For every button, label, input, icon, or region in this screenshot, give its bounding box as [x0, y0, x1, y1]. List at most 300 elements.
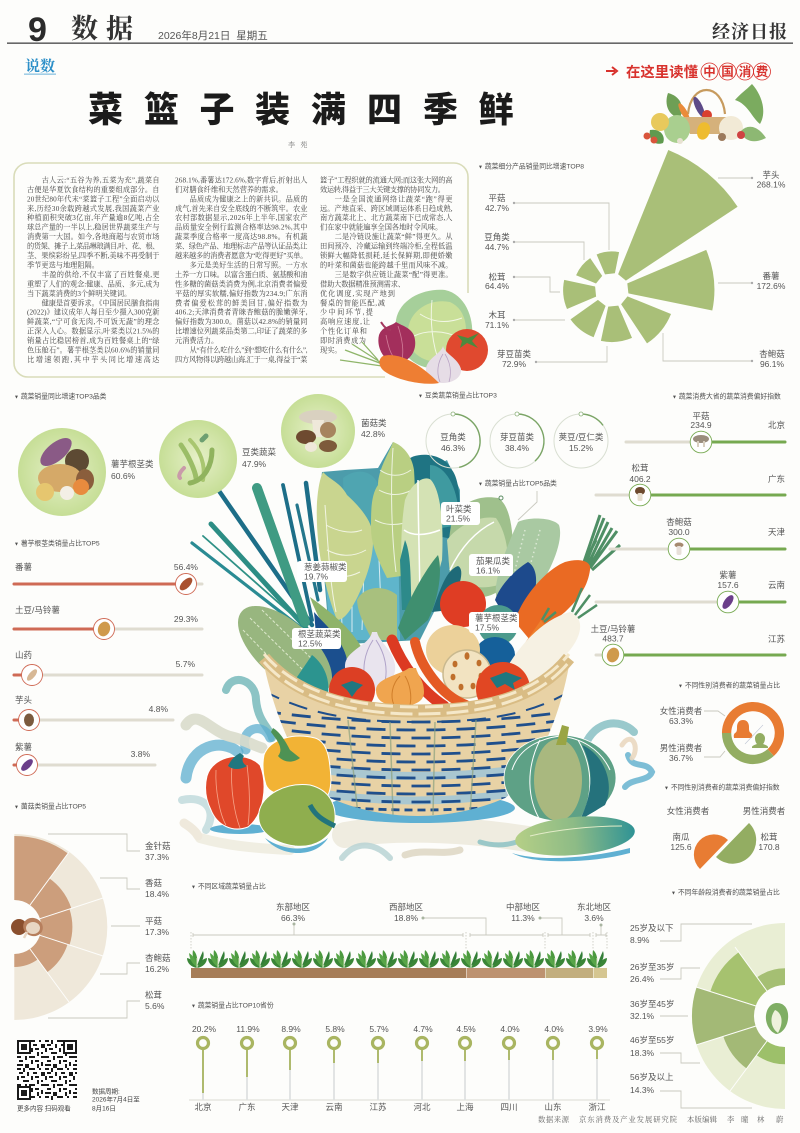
row: Guangdong: 广东 [768, 474, 785, 484]
section: tuber share TOP5 bars [14, 538, 202, 776]
ring: bean sprouts [490, 412, 544, 468]
cucumber [496, 519, 560, 608]
labels: 36岁至45岁 [630, 999, 674, 1009]
article column 2: 从“有什么吃什么”到“想吃什么有什么”, [190, 346, 308, 354]
wax gourd [448, 497, 513, 598]
region labels: 66.3% [281, 913, 305, 923]
data period note: 8月16日 [92, 1104, 116, 1112]
article column 1: 古便是华夏饮食结构的重要组成部分。自 [27, 185, 160, 194]
circle: mushrooms [281, 394, 387, 468]
pumpkin [504, 735, 616, 821]
circled characters: 国 [721, 65, 734, 79]
illustration: cabbage, onion, tomato, garlic and carrot [340, 290, 488, 384]
section: preference index by province [591, 392, 785, 666]
row: Yunnan: 云南 [768, 580, 785, 590]
garlic [345, 632, 395, 692]
label: 薯芋根茎类 [111, 459, 154, 469]
baseline [189, 1099, 610, 1101]
callout: onion ginger garlic pepper: 葱姜蒜椒类 [304, 562, 347, 572]
bar: purple sweet potato [14, 742, 155, 776]
row: Tianjin: 300.0 [668, 527, 690, 537]
bar: potato: 土豆/马铃薯 [15, 605, 60, 615]
heading: ▼ 蔬菜销量占比TOP10省份 [191, 1000, 274, 1010]
province names: 云南 [325, 1102, 343, 1112]
callout: tubers: 薯芋根茎类 [475, 613, 518, 623]
article column 1: 重塑了人们的观念:健康、品质、多元,成为 [27, 279, 160, 288]
percentages [192, 1024, 608, 1034]
row: Yunnan: 紫薯 [719, 570, 737, 580]
labels: 268.1% [757, 180, 786, 190]
labels: 72.9% [502, 359, 526, 369]
region labels: 中部地区 [506, 902, 540, 912]
navy vegetable [314, 612, 348, 690]
article column 1: 消费第一大国。如今,各地商超与农贸市场 [27, 232, 160, 241]
article column 1: 色压舱石”。薯芋根茎类以60.6%的销量同 [27, 346, 160, 354]
tomato [446, 329, 488, 371]
callout: leafy vegetables: 叶菜类 [446, 504, 472, 514]
row: Jiangsu: 483.7 [602, 634, 624, 644]
headline: 子 [200, 82, 235, 133]
headline: 满 [311, 82, 346, 133]
carrot greens [340, 342, 385, 366]
article column 3: 借助大数据精准预测需求、 [320, 279, 405, 288]
article column 1: 的货架、摊子上,菜品琳琅满目,叶、花、根、 [27, 242, 160, 251]
byline: 李 苑 [288, 140, 307, 150]
article column 2: 四方风物得以跨越山海,汇于一桌,得益于“菜 [175, 355, 308, 364]
page number: 9 [28, 11, 47, 49]
bar: potato [14, 605, 202, 640]
row: Beijing [626, 411, 785, 453]
article column 1: 丰盈的供给,不仅丰富了百姓餐桌,更 [42, 270, 160, 279]
cabbage [395, 290, 472, 368]
heading: ▼ 菌菇类销量占比TOP5 [14, 802, 86, 810]
region labels: 18.8% [394, 913, 418, 923]
icon: pea pods [179, 436, 212, 483]
region labels: 东部地区 [276, 902, 310, 912]
callout: root and stem vegetables: 12.5% [298, 638, 323, 648]
half circle: male matsutake [716, 823, 756, 864]
article column 3: 少中间环节,提 [320, 308, 373, 317]
value stems [203, 1050, 597, 1093]
percentages: 5.7% [369, 1024, 389, 1034]
row: Guangdong: 松茸 [631, 463, 649, 473]
carrot [379, 355, 439, 384]
article column 3: 二是冷链设施让蔬菜“鲜”得更久。从 [335, 232, 453, 241]
row: Jiangsu: 江苏 [768, 634, 785, 644]
green round vegetable [478, 605, 518, 645]
row: Beijing: 北京 [768, 420, 785, 430]
article column 3: 个性化订单和 [320, 327, 367, 336]
credits: 京东消费及产业发展研究院 [579, 1115, 678, 1124]
labels: 男性消费者 [743, 806, 786, 816]
row: Yunnan [596, 570, 785, 613]
data period note: 数据周期: [92, 1086, 120, 1096]
labels: 平菇 [145, 916, 163, 926]
fan chart [563, 150, 738, 343]
labels: 松茸 [488, 272, 506, 282]
donut chart [727, 707, 779, 759]
green pepper [259, 785, 335, 846]
article column 2: 农村部数据显示,2026年上半年,国家农产 [175, 213, 308, 222]
article column 1: 古人云:“五谷为养,五菜为充”,蔬菜自 [42, 175, 160, 184]
percentages: 11.9% [236, 1024, 260, 1034]
labels: 杏鲍菇 [759, 349, 785, 359]
region labels: 东北地区 [577, 902, 611, 912]
circle: beans: 47.9% [242, 459, 267, 469]
circled characters: 消 [739, 64, 751, 79]
dashed boundaries [191, 932, 607, 950]
labels: 豆角类 [484, 232, 510, 242]
potato [426, 625, 480, 675]
article column 3: 三是数字供应链让蔬菜“配”得更准。 [335, 270, 453, 279]
icon: shiitake mushrooms [11, 915, 46, 939]
region labels [276, 902, 611, 923]
callout: leafy vegetables: 21.5% [446, 514, 471, 524]
labels: 26岁至35岁 [630, 962, 674, 972]
callout: tubers [469, 612, 519, 633]
article column 2: 菜、绿色产品、地理标志产品等认证品类,让 [175, 242, 308, 251]
onion stem [381, 322, 391, 330]
region labels: 11.3% [511, 913, 535, 923]
article column 1: 销量占比稳居榜首,成为百姓餐桌上的“绿 [27, 336, 160, 345]
province names: 四川 [500, 1102, 518, 1112]
row of plants [187, 950, 607, 968]
basket shadow [325, 793, 515, 823]
credits: 曈 [741, 1115, 749, 1124]
heading: ▼ 薯芋根茎类销量占比TOP5 [14, 538, 100, 548]
section: sales share by region [187, 882, 611, 978]
bar: taro [14, 695, 173, 730]
labels: 56岁及以上 [630, 1072, 674, 1082]
labels: 64.4% [485, 281, 509, 291]
credits: 林 [757, 1115, 765, 1124]
leader lines [514, 178, 752, 362]
region labels: 西部地区 [389, 902, 423, 912]
labels: 37.3% [145, 852, 170, 862]
labels: 16.2% [145, 964, 170, 974]
article column 3: 们在家中就能遍享全国各地时令风味。 [320, 223, 442, 232]
grey stems [203, 1050, 597, 1100]
article column 2: 费者偏爱松茸的鲜美回甘,偏好指数为 [175, 298, 308, 307]
article column 1: 鲜蔬菜,“宁可食无肉,不可饭无蔬”的理念 [27, 317, 160, 326]
row: Beijing: 平菇 [692, 411, 710, 421]
daikon [500, 612, 580, 695]
newspaper logo: 经济日报 [712, 18, 788, 44]
labels: 女性消费者 [660, 706, 703, 716]
heading: ▼ 不同性别消费者的蔬菜销量占比 [678, 680, 780, 690]
labels: 8.9% [630, 935, 650, 945]
radial chart [692, 923, 800, 1109]
labels: 杏鲍菇 [145, 953, 171, 963]
data period note [92, 1086, 140, 1112]
pepper shadow [210, 824, 270, 834]
half circle: female pumpkin [694, 834, 728, 869]
bar: yam [14, 650, 202, 686]
bar: yam: 山药 [15, 650, 32, 660]
callout: nightshades and melons: 茄果瓜类 [476, 556, 511, 566]
labels: 香菇 [145, 878, 163, 888]
section: preference index by gender [664, 782, 786, 869]
ring: soybean: 荚豆/豆仁类 [559, 432, 604, 442]
labels: 18.3% [630, 1048, 655, 1058]
article column 3: 优化调度,实现产地到 [320, 289, 395, 298]
labels: 5.6% [145, 1001, 165, 1011]
article column 1: 种植面积突破3亿亩,年产量逾8亿吨,占全 [27, 213, 160, 222]
bar: purple sweet potato: 3.8% [131, 749, 150, 759]
heading: ▼ 蔬菜消费大省的蔬菜消费偏好指数 [672, 392, 781, 400]
QR code [17, 1040, 77, 1100]
row: Beijing: 234.9 [690, 420, 712, 430]
labels: 金针菇 [145, 841, 171, 851]
onion [378, 322, 415, 363]
chillies [392, 640, 444, 706]
article column 1 [27, 175, 160, 364]
province names: 河北 [413, 1102, 431, 1112]
leader dots [292, 916, 602, 926]
row: Tianjin [610, 517, 785, 560]
article column 2: 268.1%,番薯达172.6%,数字背后,折射出人 [175, 175, 308, 184]
article column 2: 品质成为健康之上的新共识。品质的 [190, 194, 308, 203]
circle: tubers: 60.6% [111, 471, 136, 481]
ring: green beans [426, 412, 480, 468]
section: sales share by age [630, 888, 800, 1109]
circled characters [703, 64, 769, 79]
credits [538, 1115, 784, 1124]
labels: 71.1% [485, 320, 509, 330]
article column 2: 平菇的厚实软糯,偏好指数为234.9;广东消 [175, 289, 308, 298]
article column 3: 现实。 [320, 346, 342, 354]
blue vegetable [475, 637, 515, 673]
labels: 芽豆苗类 [497, 349, 531, 359]
heading: ▼ 不同年龄段消费者的蔬菜销量占比 [671, 888, 780, 896]
labels: 芋头 [762, 170, 780, 180]
article column 1: 比增速领跑,其中芋头同比增速高达 [27, 355, 160, 364]
article column 1: (2022)》建议成年人每日至少摄入300克新 [27, 308, 160, 317]
tomato centre [440, 581, 486, 627]
article column 1: 来,历经30余载跨越式发展,我国蔬菜产业 [27, 204, 160, 213]
labels: 18.4% [145, 889, 170, 899]
percentages: 3.9% [588, 1024, 608, 1034]
article column 3: 田间预冷、冷藏运输到终端冷柜,全程低温 [320, 242, 453, 251]
article column 3: 的叶菜和菌菇也能跨越千里而风味不减。 [320, 260, 452, 270]
labels: 26.4% [630, 974, 655, 984]
article column 3 [320, 175, 453, 354]
section: bean vegetables TOP3 [418, 390, 608, 468]
eggplant [495, 562, 536, 625]
headline: 装 [255, 82, 290, 133]
pepper shadow [265, 838, 328, 853]
headline: 鲜 [478, 82, 514, 133]
article column 1: 球总产量的一半以上,稳居世界蔬菜生产与 [27, 223, 160, 232]
labels: 172.6% [757, 281, 786, 291]
credits: 李 [727, 1115, 735, 1124]
left gourd [223, 590, 347, 710]
percentages: 20.2% [192, 1024, 216, 1034]
row: Guangdong: 406.2 [629, 474, 651, 484]
circle: mushrooms: 42.8% [361, 429, 386, 439]
province names: 北京 [194, 1102, 212, 1112]
ring: green beans: 豆角类 [440, 432, 466, 442]
labels: 木耳 [488, 310, 506, 320]
icon: mushrooms [296, 410, 337, 452]
labels: 125.6 [670, 842, 692, 852]
circled characters: 中 [703, 64, 716, 79]
headline: 四 [367, 82, 402, 133]
article column 2: 多元是美好生活的日常写照。一方水 [190, 260, 308, 270]
pumpkin stem [556, 725, 569, 745]
province names: 广东 [238, 1102, 256, 1112]
label: 菌菇类 [361, 418, 387, 428]
callout: onion ginger garlic pepper: 19.7% [304, 572, 329, 582]
percentages: 4.0% [500, 1024, 520, 1034]
callout: nightshades and melons: 16.1% [476, 566, 501, 576]
data period note: 2026年7月4日至 [92, 1094, 140, 1104]
bar: taro: 芋头 [15, 695, 33, 705]
column tag: 说数 [25, 55, 55, 76]
ring: soybean [554, 412, 608, 468]
percentages: 4.7% [413, 1024, 433, 1034]
article column 2: 406.2;天津消费者青睐杏鲍菇的脆嫩弹牙, [175, 308, 308, 317]
bar: yam: 5.7% [176, 659, 195, 669]
small carrot [502, 620, 548, 685]
row: Jiangsu: 土豆/马铃薯 [591, 624, 636, 634]
article column 2: 土养一方口味。以富含蛋白质、氨基酸和油 [175, 270, 308, 279]
labels [630, 923, 674, 1095]
headline: 季 [423, 82, 458, 133]
labels: 96.1% [760, 359, 784, 369]
labels: 170.8 [758, 842, 780, 852]
ring: green beans: 46.3% [441, 443, 465, 453]
scallions [192, 483, 320, 628]
labels: 36.7% [669, 753, 693, 763]
leaf backing [318, 442, 460, 645]
campaign slogan [606, 63, 770, 81]
row: Guangdong [596, 463, 785, 506]
icon: arrow [606, 67, 617, 75]
icon: napa cabbage [766, 1003, 788, 1034]
row: Tianjin: 杏鲍菇 [666, 517, 692, 527]
leader lines [660, 924, 752, 1108]
credits: 本版编辑 [687, 1115, 718, 1124]
cucumber shadow [512, 848, 630, 861]
masthead rule [7, 42, 793, 44]
article column 3: 远。产地直采、跨区域调运体系日趋成熟, [320, 204, 453, 213]
labels: 42.7% [485, 203, 509, 213]
article column 1: 正深入人心。数据显示,叶菜类以21.5%的 [27, 327, 160, 336]
green leaf left [310, 597, 363, 662]
circle: beans [159, 420, 277, 498]
date: 2026年8月21日 星期五 [158, 29, 268, 42]
labels: 46岁至55岁 [630, 1035, 674, 1045]
row: Jiangsu [591, 624, 785, 666]
bar: potato: 29.3% [174, 614, 198, 624]
section heading: category growth TOP3: ▼ 蔬菜销量同比增速TOP3品类 [14, 392, 107, 400]
province names: 上海 [456, 1102, 474, 1112]
central illustration: vegetable basket [182, 442, 652, 861]
bar: sweet potato [14, 562, 202, 594]
yellow pepper [263, 736, 331, 802]
brackets and leaders [193, 918, 606, 937]
lotus root slice [443, 650, 491, 698]
circled characters: 费 [756, 64, 769, 79]
article column 1: 季节更迭与地理阻隔。 [27, 260, 99, 270]
section name: 数据 [71, 7, 141, 46]
radial chart [0, 834, 107, 1020]
article column 2: 蔬菜季度合格率一度高达98.8%。有机蔬 [175, 232, 308, 241]
article column 1: 健康是首要诉求。《中国居民膳食指南 [42, 298, 160, 307]
basket body [264, 668, 568, 816]
article column 2: 越来越多的消费者愿意为“吃得更好”买单。 [175, 251, 308, 260]
labels [667, 806, 786, 852]
article column 3: 一是全国流通网络让蔬菜“跑”得更 [335, 194, 453, 203]
labels: 14.3% [630, 1085, 655, 1095]
QR caption: 更多内容 扫码观看 [17, 1104, 71, 1112]
decorative swirls [182, 680, 652, 858]
leader lines [704, 711, 725, 757]
labels [660, 706, 703, 763]
pins [198, 1038, 602, 1048]
bar: sweet potato: 56.4% [174, 562, 198, 572]
heading: ▼ 不同性别消费者的蔬菜消费偏好指数 [664, 782, 780, 792]
row: Yunnan: 157.6 [717, 580, 739, 590]
leaves [343, 472, 380, 540]
soil share bar [191, 968, 607, 978]
ring: bean sprouts: 芽豆苗类 [500, 432, 534, 442]
article column 3: 篮子”工程织就的流通大网;而这张大网的高 [320, 175, 452, 184]
region labels: 3.6% [584, 913, 604, 923]
labels: 男性消费者 [660, 743, 703, 753]
labels: 松茸 [145, 990, 162, 1000]
credits: 数据来源 [538, 1115, 570, 1124]
label: 豆类蔬菜 [242, 447, 277, 457]
headline: 菜 [88, 82, 123, 133]
ring: soybean: 15.2% [569, 443, 593, 453]
province names: 浙江 [588, 1102, 606, 1112]
section: provinces TOP10 [189, 1000, 610, 1112]
article column 3: 南方蔬菜北上、北方蔬菜南下已成常态,人 [320, 213, 452, 222]
circle: tubers [18, 428, 154, 516]
article column 2: 性多糖的菌菇类消费为例,北京消费者偏爱 [175, 279, 308, 288]
leader lines [48, 834, 140, 1018]
labels: 女性消费者 [667, 806, 710, 816]
leader dots [513, 177, 753, 363]
heading: ▼ 不同区域蔬菜销量占比 [191, 882, 266, 890]
article column 2: 品质量安全例行监测合格率达98.2%,其中 [175, 223, 308, 232]
labels: 63.3% [669, 716, 693, 726]
heading: ▼ 豆类蔬菜销量占比TOP3 [418, 390, 497, 400]
callout: root and stem vegetables [292, 628, 341, 649]
headline [88, 82, 514, 133]
icon: tubers [36, 433, 94, 501]
article column 3: 高响应速度,让 [320, 317, 370, 326]
labels [484, 170, 786, 369]
section heading: ▼ 蔬菜细分产品销量同比增速TOP8 [478, 162, 584, 170]
province names: 江苏 [369, 1102, 387, 1112]
tomato left [329, 667, 375, 713]
section heading and pointer: category share TOP5 [478, 478, 557, 520]
article column 2: 元消费活力。 [175, 336, 218, 345]
callout: root and stem vegetables: 根茎蔬菜类 [298, 629, 341, 639]
section heading and pointer: category share TOP5: ▼ 蔬菜销量占比TOP5品类 [478, 478, 557, 488]
bar: purple sweet potato: 紫薯 [15, 742, 33, 752]
finder centres [21, 1044, 73, 1096]
labels: 南瓜 [672, 832, 690, 842]
article column 2: 们对膳食纤维和天然营养的需求。 [175, 185, 283, 194]
callout: leafy vegetables [441, 502, 480, 525]
percentages: 4.0% [544, 1024, 564, 1034]
divider line [745, 725, 763, 744]
labels: 32.1% [630, 1011, 655, 1021]
